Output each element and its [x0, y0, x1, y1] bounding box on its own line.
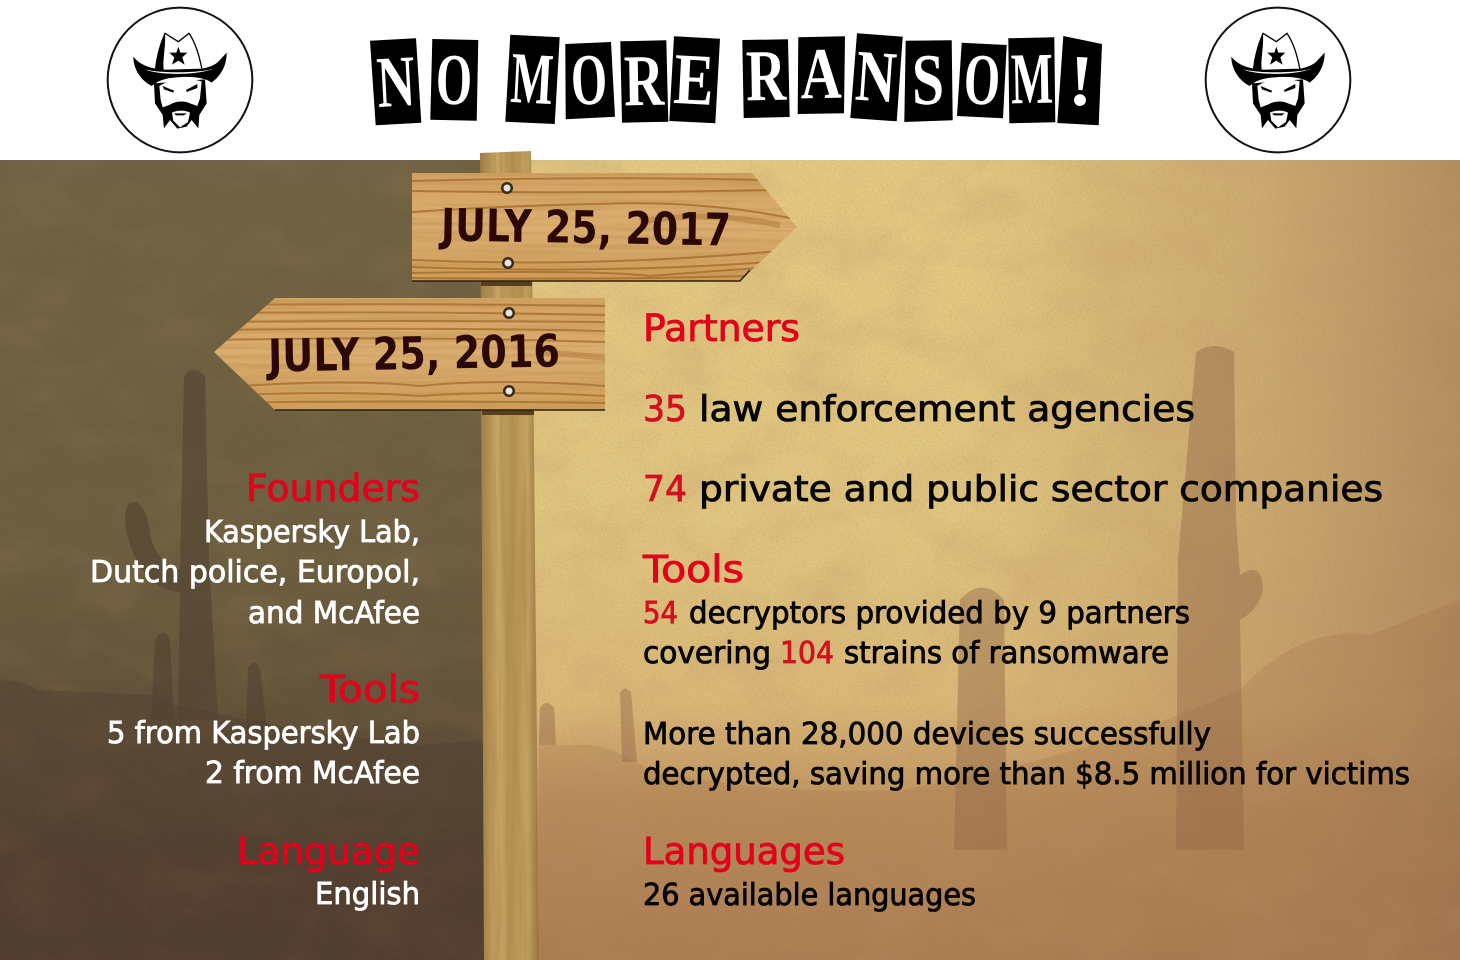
title: No More Ransom ransom-note letters: M: [509, 37, 555, 120]
screw: top: [503, 307, 515, 319]
text block: 2017 tools: strains of ransomware: [844, 636, 1169, 671]
title: No More Ransom ransom-note letters: N: [853, 35, 899, 118]
title: No More Ransom ransom-note letters: O: [962, 38, 1002, 121]
signpost: vertical wooden post: [478, 150, 542, 960]
text block: 2017 tools: decryptors provided by 9 partners: [689, 596, 1190, 631]
sign: July 25, 2017 arrow pointing right: [410, 170, 800, 284]
text block: partners: law enforcement agencies: [699, 389, 1195, 430]
text block: 2017 tools: covering: [643, 636, 771, 671]
text block: partners: Partners: [643, 307, 800, 350]
text block: partners: 74: [643, 469, 687, 510]
text block: founders: Kaspersky Lab,: [204, 515, 420, 550]
title: No More Ransom ransom-note letters: E: [672, 38, 716, 121]
title: No More Ransom ransom-note letters: O: [435, 39, 473, 120]
text block: founders: and McAfee: [248, 596, 420, 631]
text block: founders: Dutch police, Europol,: [90, 555, 420, 590]
background: left dark panel: [0, 160, 484, 960]
sign: July 25, 2016 arrow pointing left: [212, 296, 608, 412]
date label 2016: JULY 25, 2016: [265, 324, 560, 383]
text block: 2017 tools: 104: [780, 636, 834, 671]
text block: partners: [643, 307, 1383, 510]
text block: partners: private and public sector companies: [699, 469, 1383, 510]
text block: 2017 tools: Tools: [642, 548, 744, 591]
date label 2017: JULY 25, 2017: [438, 198, 731, 257]
title: No More Ransom ransom-note letters: S: [911, 39, 945, 120]
text block: 2016 tools: 2 from McAfee: [205, 756, 420, 791]
title: No More Ransom ransom-note letters: N: [375, 40, 417, 123]
background: right desert panel: [480, 160, 1460, 960]
text block: 2017 languages: [643, 830, 976, 913]
text block: devices decrypted: More than 28,000 devices successfully: [643, 717, 1211, 752]
screw: bottom: [502, 257, 514, 269]
text block: 2016 tools: 5 from Kaspersky Lab: [107, 716, 420, 751]
title: No More Ransom ransom-note letters: R: [623, 40, 666, 121]
text block: 2016 language: English: [315, 877, 420, 912]
text block: 2016 tools: Tools: [319, 668, 420, 711]
text block: devices decrypted: decrypted, saving more than $8.5 million for victims: [643, 757, 1410, 792]
text block: 2016 language: Language: [237, 830, 420, 873]
text block: partners: 35: [643, 389, 687, 430]
title: No More Ransom ransom-note letters: R: [745, 35, 788, 116]
text block: 2017 tools: 54: [643, 596, 678, 631]
screw: bottom: [503, 385, 515, 397]
title: No More Ransom ransom-note letters: M: [1010, 38, 1054, 119]
background: white header band: [0, 0, 1460, 160]
text block: 2016 tools: [107, 668, 420, 791]
icon: right cowboy badge: [1206, 8, 1350, 152]
text block: founders: [90, 467, 420, 631]
text block: devices decrypted: [643, 717, 1410, 792]
text block: 2017 languages: 26 available languages: [643, 878, 976, 913]
title: No More Ransom ransom-note letters: A: [800, 33, 842, 114]
screw: top: [501, 182, 513, 194]
text block: founders: Founders: [246, 467, 420, 510]
text block: 2017 tools: [642, 548, 1190, 671]
title: No More Ransom ransom-note letters: [370, 33, 1102, 125]
text block: 2016 language: [237, 830, 420, 912]
text block: 2017 languages: Languages: [643, 830, 845, 873]
title: No More Ransom ransom-note letters: O: [570, 38, 608, 121]
icon: left cowboy badge: [108, 8, 252, 152]
title: No More Ransom ransom-note letters: !: [1067, 39, 1095, 122]
